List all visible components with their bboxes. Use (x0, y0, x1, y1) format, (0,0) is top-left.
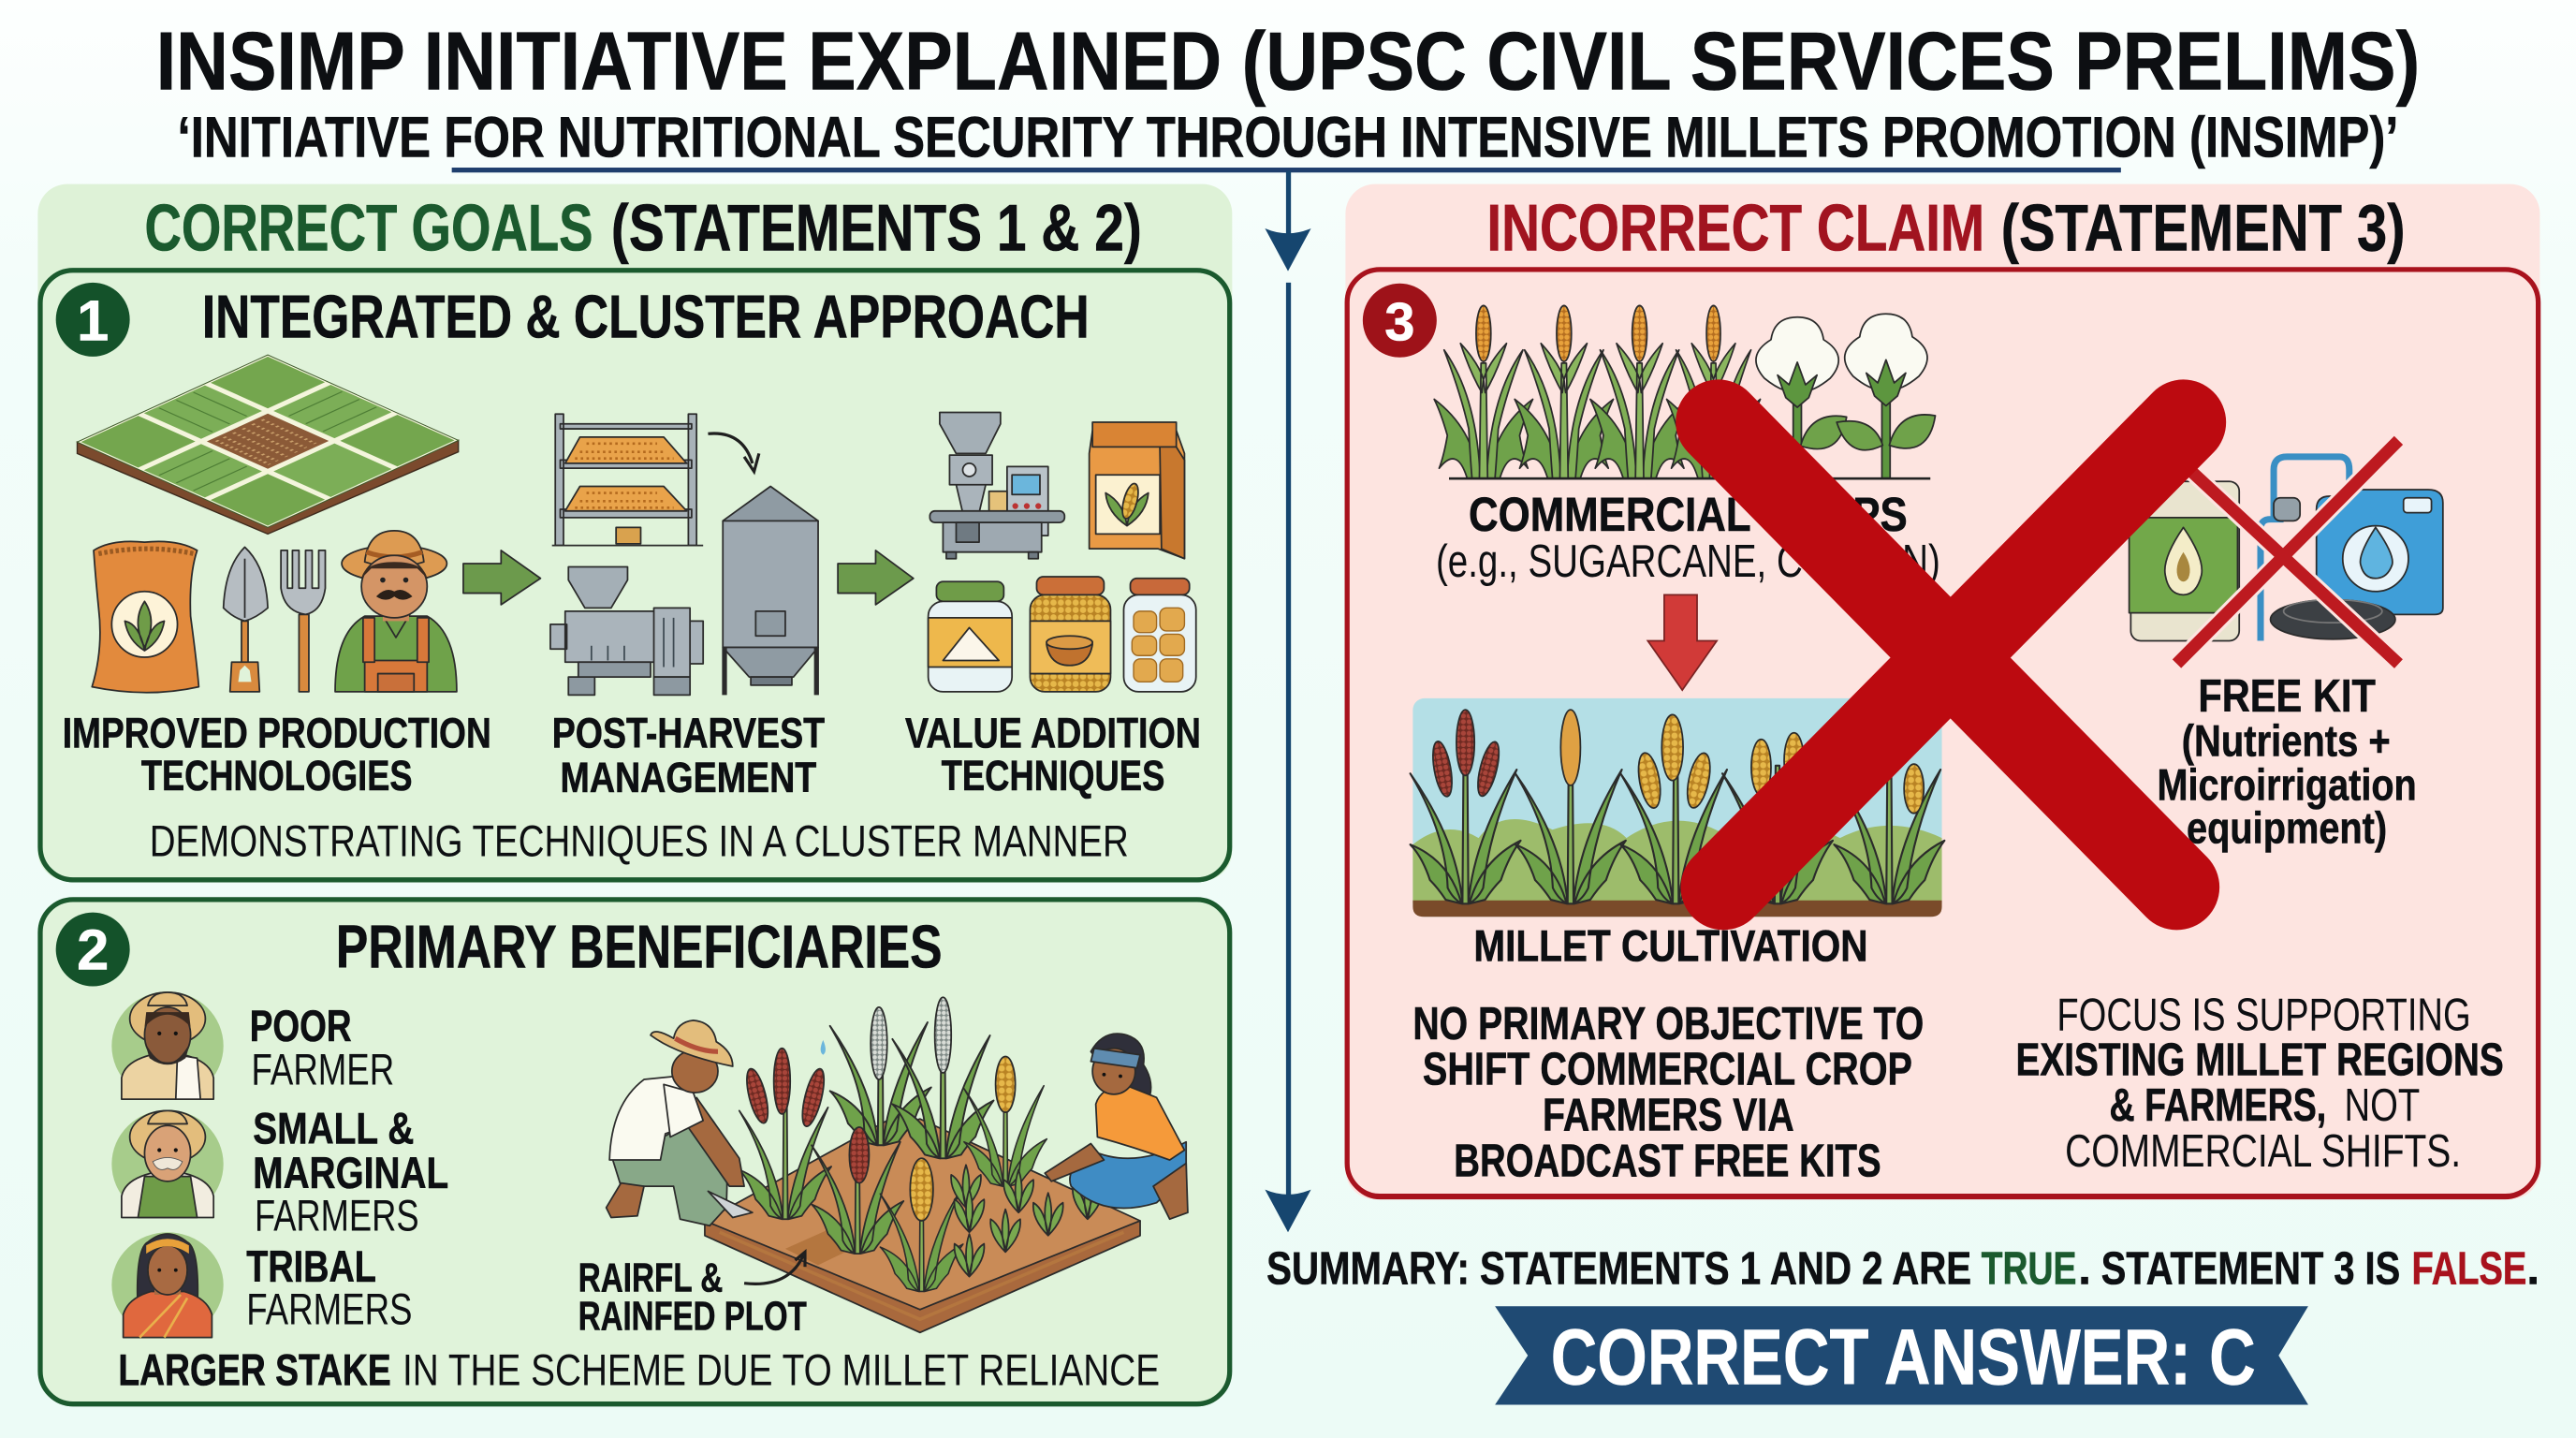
icon: millet packet (1090, 422, 1184, 559)
caption: cluster manner: DEMONSTRATING TECHNIQUES IN A CLUSTER MANNER (150, 816, 1129, 866)
panel 3 box (1347, 270, 2539, 1199)
badge 1 (56, 283, 130, 357)
label: improved production technologies (63, 710, 491, 800)
label: post-harvest management: MANAGEMENT (560, 754, 816, 801)
portrait: tribal farmer (111, 1232, 224, 1338)
icon: cluster field (77, 355, 459, 534)
label: poor farmer: POOR (250, 1002, 352, 1051)
label: small and marginal farmers (253, 1105, 448, 1241)
caption: larger stake: IN THE SCHEME DUE TO MILLET RELIANCE (402, 1345, 1160, 1395)
banner: correct answer: CORRECT ANSWER: C (1551, 1313, 2256, 1401)
label: free kit (2157, 671, 2417, 853)
label: free kit: FREE KIT (2198, 671, 2376, 722)
text: no primary objective: BROADCAST FREE KITS (1454, 1137, 1881, 1187)
text: focus is supporting: COMMERCIAL SHIFTS. (2065, 1126, 2461, 1177)
text: no primary objective: SHIFT COMMERCIAL CROP (1423, 1044, 1912, 1094)
label: small and marginal farmers: SMALL & (253, 1104, 414, 1153)
text: focus is supporting: NOT (2345, 1080, 2420, 1131)
label: tribal farmers: FARMERS (246, 1285, 413, 1335)
heading: correct goals (144, 191, 1142, 265)
label: post-harvest management: POST-HARVEST (552, 710, 825, 757)
icon: silo (723, 486, 818, 695)
icon: free kit with cross (2130, 440, 2443, 664)
heading: incorrect claim: (STATEMENT 3) (2001, 191, 2405, 265)
label: poor farmer (250, 1002, 394, 1094)
summary line: FALSE (2411, 1244, 2526, 1295)
panel: correct goals (37, 184, 1232, 882)
badge 1: 1 (77, 288, 109, 353)
label: tribal farmers: TRIBAL (246, 1242, 376, 1292)
summary line: . (2078, 1244, 2091, 1295)
panel: incorrect claim (1345, 184, 2539, 1199)
text: focus is supporting: FOCUS IS SUPPORTING (2056, 990, 2471, 1040)
icon: jars of millet products (929, 577, 1196, 692)
label: rainfed plot: RAINFED PLOT (578, 1294, 807, 1340)
label: small and marginal farmers: MARGINAL (253, 1149, 448, 1198)
text: no primary objective: NO PRIMARY OBJECTIVE TO (1412, 999, 1924, 1049)
summary line (1266, 1244, 2539, 1295)
caption: larger stake (118, 1345, 1160, 1395)
label: commercial crops: (e.g., SUGARCANE, COTTON) (1436, 536, 1940, 587)
icon: grain mill (550, 566, 703, 695)
text: focus is supporting: & FARMERS, (2110, 1080, 2326, 1131)
label: rainfed plot (578, 1255, 807, 1340)
arrow: label to plot (744, 1252, 805, 1284)
label: rainfed plot: RAIRFL & (578, 1255, 723, 1300)
label: value addition techniques: TECHNIQUES (942, 752, 1164, 800)
heading: INTEGRATED & CLUSTER APPROACH (202, 283, 1090, 351)
panel 2: primary beneficiaries (40, 900, 1230, 1406)
label: improved production technologies: TECHNOLOGIES (141, 752, 413, 800)
label: tribal farmers (246, 1242, 413, 1335)
label: improved production technologies: IMPROVED PRODUCTION (63, 710, 491, 757)
label: value addition techniques: VALUE ADDITION (905, 710, 1201, 757)
arrow: post-harvest to value addition (838, 550, 914, 605)
heading: correct goals: CORRECT GOALS (144, 191, 593, 265)
badge 2: 2 (77, 917, 109, 982)
illustration: farmers tending millet plot (607, 997, 1188, 1332)
badge 2 (56, 913, 130, 987)
icon: drying rack (552, 414, 703, 546)
label: poor farmer: FARMER (252, 1045, 394, 1094)
portrait: poor farmer (111, 991, 224, 1100)
panel 1: integrated and cluster approach (40, 271, 1230, 882)
arrow: shift to millets (1647, 594, 1717, 690)
summary line: STATEMENT 3 IS (2101, 1244, 2400, 1295)
label: commercial crops (1436, 488, 1940, 587)
summary line: TRUE (1982, 1244, 2076, 1295)
icon: commercial crops (1434, 305, 1936, 479)
arrow: curved rack to silo (708, 433, 759, 472)
icon: farmer (335, 531, 457, 692)
label: small and marginal farmers: FARMERS (255, 1192, 419, 1241)
label: free kit: Microirrigation (2157, 761, 2417, 811)
icon: shovel and fork (224, 547, 326, 692)
badge 3: 3 (1384, 292, 1414, 352)
badge 3 (1363, 284, 1437, 358)
portrait: small and marginal farmer (111, 1110, 224, 1218)
icon: seed sack (92, 541, 198, 693)
figure: woman planting (1045, 1034, 1188, 1219)
illustration: millet field (1411, 698, 1944, 917)
icon: processing machine (929, 413, 1064, 559)
label: post-harvest management (552, 710, 825, 801)
arrow: production to post-harvest (463, 550, 540, 605)
arrow: panels to summary (1265, 283, 1311, 1232)
caption: larger stake: LARGER STAKE (118, 1345, 391, 1395)
heading: PRIMARY BENEFICIARIES (336, 913, 943, 981)
heading: incorrect claim (1486, 191, 2405, 265)
text: focus is supporting (2016, 990, 2504, 1177)
summary line: . (2526, 1244, 2539, 1295)
label: free kit: (Nutrients + (2182, 716, 2391, 766)
label: commercial crops: COMMERCIAL CROPS (1469, 488, 1908, 541)
label: free kit: equipment) (2187, 803, 2387, 853)
heading: correct goals: (STATEMENTS 1 & 2) (611, 191, 1142, 265)
summary line: SUMMARY: STATEMENTS 1 AND 2 ARE (1266, 1244, 1971, 1295)
figure: man with trowel (607, 1020, 753, 1225)
label: millet cultivation: MILLET CULTIVATION (1473, 922, 1868, 972)
text: no primary objective (1412, 999, 1924, 1187)
subtitle underline (452, 168, 2121, 172)
text: no primary objective: FARMERS VIA (1543, 1090, 1794, 1140)
heading: incorrect claim: INCORRECT CLAIM (1486, 191, 1984, 265)
arrow: title to panels (1265, 171, 1311, 271)
label: value addition techniques (905, 710, 1201, 800)
big red cross (1719, 422, 2184, 888)
